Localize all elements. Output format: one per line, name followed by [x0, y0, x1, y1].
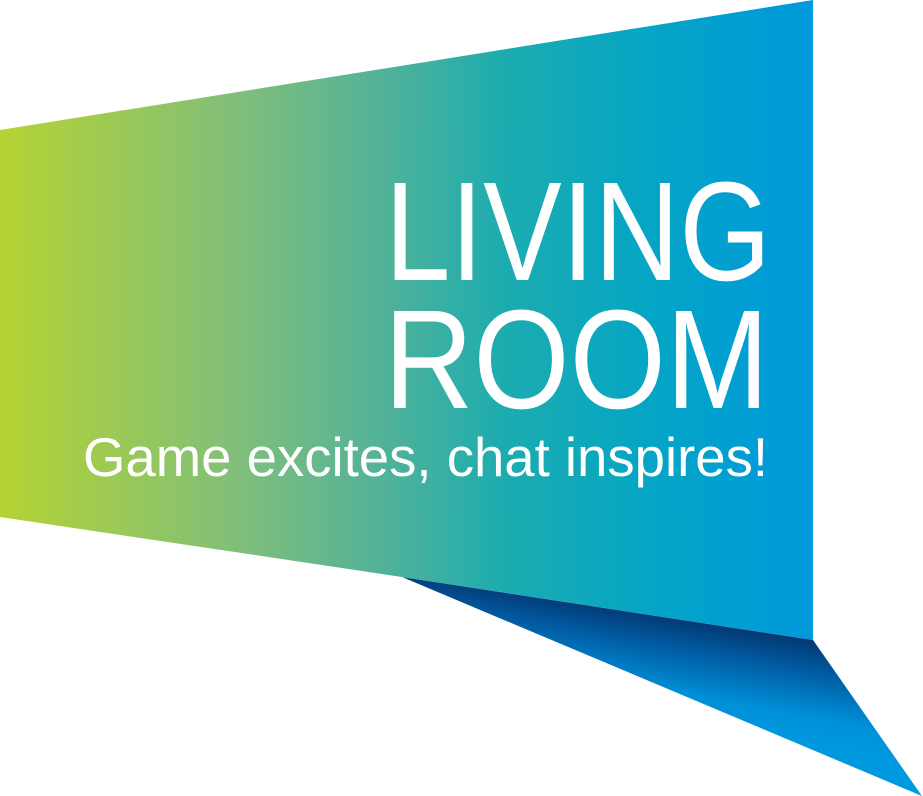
main gradient banner: [0, 0, 813, 640]
speech tail fold: [402, 577, 922, 796]
title: ROOM: ROOM: [384, 280, 769, 438]
tagline: Game excites, chat inspires!: [83, 426, 768, 488]
title: LIVING: LIVING: [385, 152, 771, 310]
